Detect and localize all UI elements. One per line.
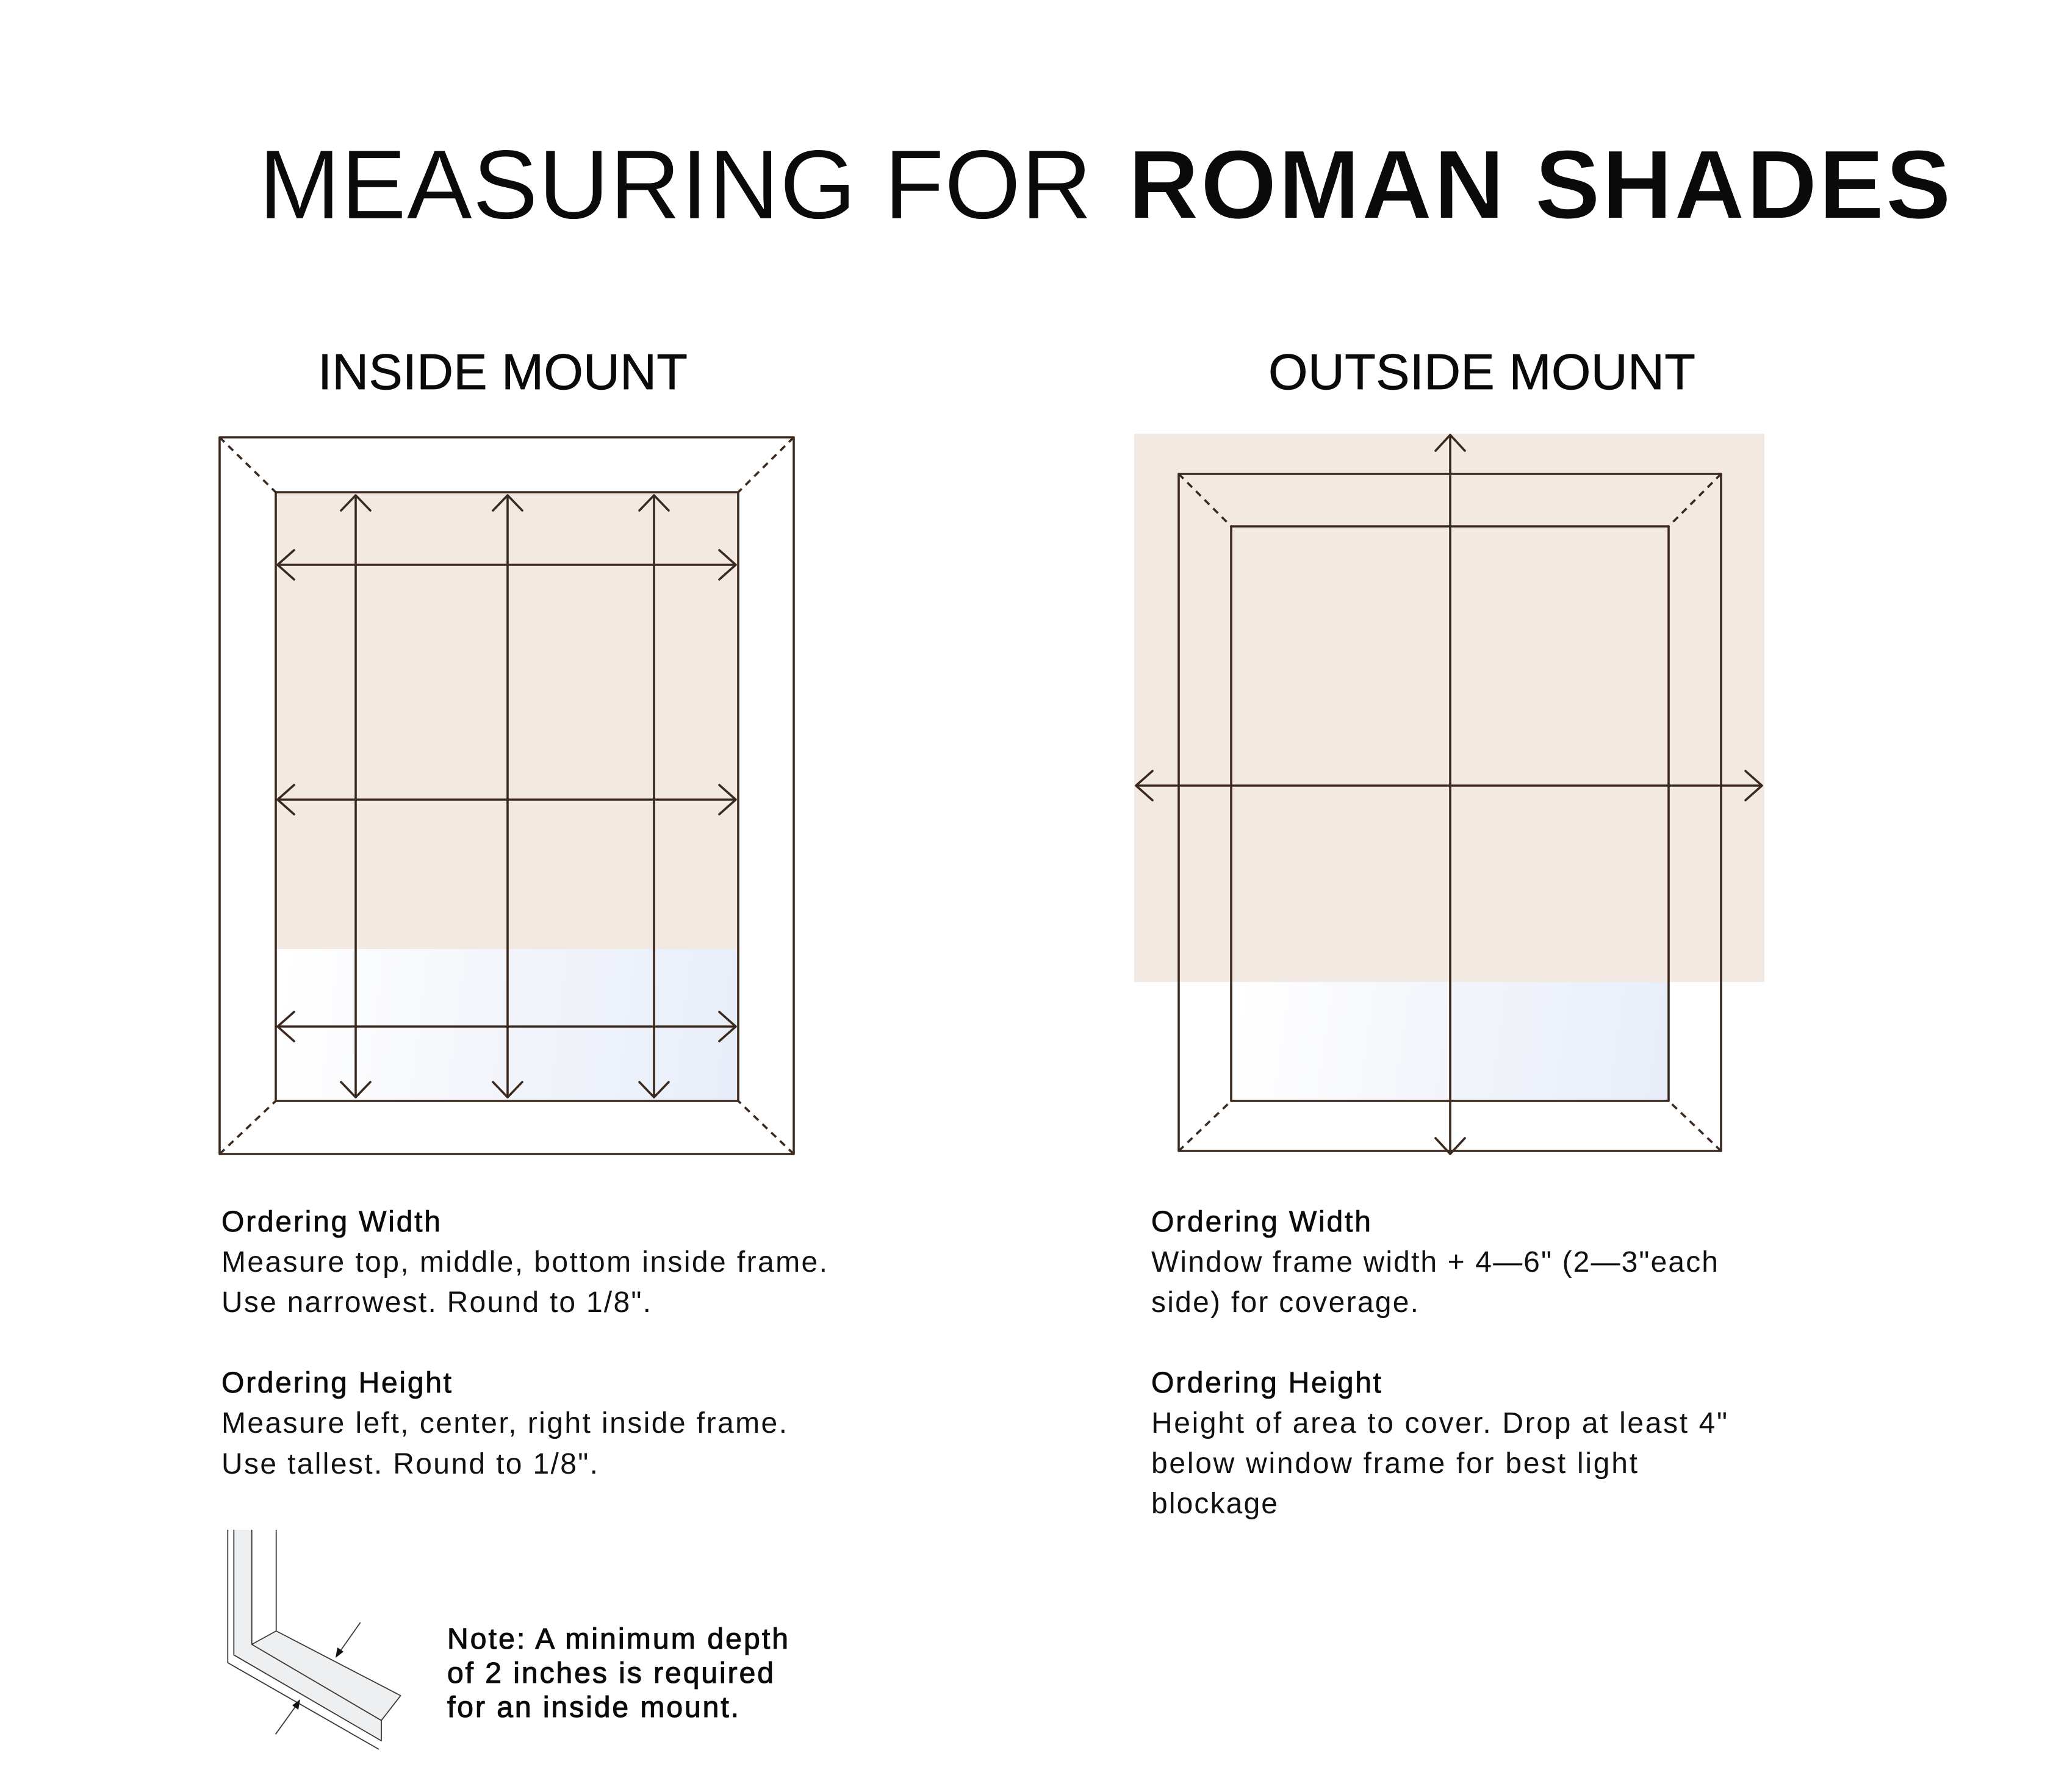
panel: outside mount diagram (1134, 434, 1764, 1154)
text block: inside mount ordering height: Ordering Height (221, 1367, 451, 1399)
text block: outside mount ordering height: below window frame for best light (1151, 1447, 1637, 1480)
arrow: width (1136, 771, 1762, 800)
arrow: left height (341, 495, 370, 1097)
text block: outside mount ordering height: Ordering Height (1151, 1367, 1381, 1399)
text block: inside mount ordering height (221, 1367, 787, 1480)
text block: inside mount ordering width: Ordering Width (221, 1206, 440, 1238)
text block: inside mount ordering width: Measure top, middle, bottom inside frame. (221, 1246, 827, 1278)
callout: minimum depth note (447, 1623, 788, 1724)
callout: minimum depth note: for an inside mount. (447, 1691, 739, 1724)
arrow: height (1436, 435, 1465, 1154)
title: MEASURING FOR (259, 130, 1092, 240)
heading: inside mount: INSIDE MOUNT (318, 343, 688, 400)
frame lines (228, 1530, 401, 1749)
shade fabric (276, 492, 738, 949)
text block: inside mount ordering height: Use tallest. Round to 1/8". (221, 1448, 598, 1480)
arrow: sill depth top (336, 1622, 361, 1658)
text block: outside mount ordering height (1151, 1367, 1727, 1520)
arrow: middle width (278, 785, 736, 814)
text block: outside mount ordering height: Height of area to cover. Drop at least 4" (1151, 1407, 1727, 1439)
window frame (220, 437, 794, 1154)
arrow: bottom width (278, 1012, 736, 1041)
text block: inside mount ordering width: Use narrowest. Round to 1/8". (221, 1286, 651, 1319)
arrow: top width (278, 550, 736, 579)
callout: minimum depth note: Note: A minimum depth (447, 1623, 788, 1655)
window glass (276, 949, 738, 1101)
heading: outside mount: OUTSIDE MOUNT (1268, 343, 1695, 400)
text block: outside mount ordering width: Window frame width + 4—6" (2—3"each (1151, 1246, 1718, 1278)
arrow: right height (639, 495, 669, 1097)
sill fill (234, 1530, 401, 1741)
callout: minimum depth note: of 2 inches is required (447, 1657, 774, 1690)
title: ROMAN SHADES (1128, 130, 1951, 240)
text block: outside mount ordering width: side) for coverage. (1151, 1286, 1418, 1319)
window glass (1231, 982, 1669, 1101)
text block: outside mount ordering width: Ordering Width (1151, 1206, 1371, 1238)
icon: window sill depth illustration (228, 1530, 401, 1749)
title (259, 130, 1951, 240)
panel: inside mount diagram (220, 437, 794, 1154)
text block: inside mount ordering width (221, 1206, 827, 1319)
shade fabric (1134, 434, 1764, 982)
text block: inside mount ordering height: Measure left, center, right inside frame. (221, 1407, 787, 1439)
arrow: sill depth bottom (276, 1699, 300, 1734)
text block: outside mount ordering width (1151, 1206, 1718, 1319)
window frame (1179, 474, 1721, 1151)
arrow: center height (493, 495, 522, 1097)
text block: outside mount ordering height: blockage (1151, 1488, 1278, 1520)
